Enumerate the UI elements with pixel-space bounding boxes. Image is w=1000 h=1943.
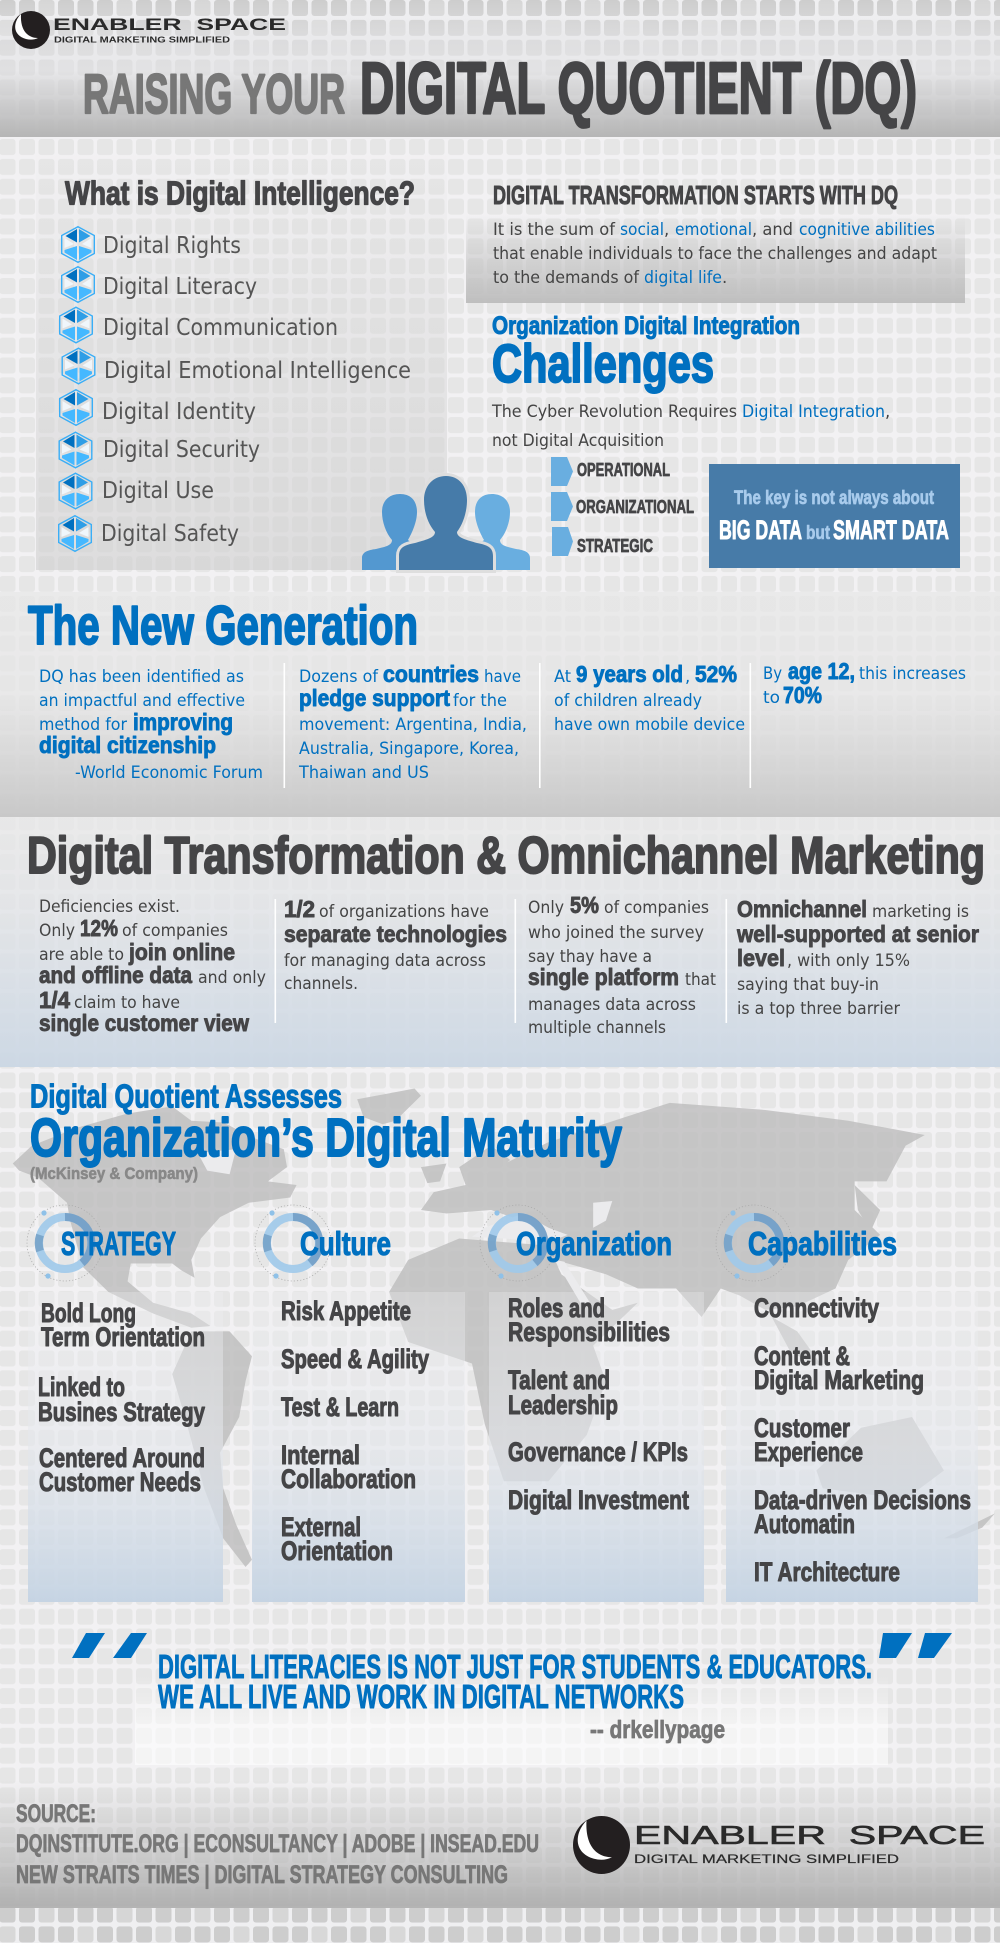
panel: digital transformation starts with DQ: , xyxy=(664,220,669,239)
list item: digital communication: Digital Communication xyxy=(103,313,338,341)
logo: top xyxy=(12,11,286,49)
list item: digital literacy: Digital Literacy xyxy=(103,272,257,300)
text: world economic forum: digital citizenship xyxy=(39,732,216,758)
panel: what is digital intelligence xyxy=(36,150,447,570)
text: deficiencies exist: of companies xyxy=(122,921,228,940)
list item: digital literacy xyxy=(62,267,257,302)
items: strategy: Customer Needs xyxy=(39,1467,201,1497)
logo: bottom xyxy=(573,1816,985,1874)
arrow: strategic: STRATEGIC xyxy=(577,536,653,556)
text: quote attribution: -- drkellypage xyxy=(590,1716,725,1744)
items: culture: External xyxy=(281,1512,361,1542)
panel: digital transformation starts with DQ: to the demands of xyxy=(493,268,640,287)
text: single platform: Only xyxy=(528,898,564,917)
items: culture: Collaboration xyxy=(281,1464,416,1494)
text: age 12: 70% xyxy=(783,682,822,708)
items: strategy: Centered Around xyxy=(39,1443,205,1473)
items: capabilities: Experience xyxy=(754,1437,863,1467)
items: strategy: Term Orientation xyxy=(41,1322,205,1352)
list item: digital rights: Digital Rights xyxy=(103,231,241,259)
text: countries pledge support: Dozens of xyxy=(299,667,379,686)
text: age 12: By xyxy=(763,664,782,683)
heading: capabilities: Capabilities xyxy=(748,1225,897,1262)
arrow: organizational xyxy=(551,492,694,521)
text: source: SOURCE: xyxy=(16,1800,96,1828)
text: source xyxy=(16,1800,539,1889)
text: deficiencies exist: Deficiencies exist. xyxy=(39,897,180,916)
arrow: operational xyxy=(551,457,670,486)
items: capabilities xyxy=(754,1293,971,1587)
panel: digital transformation starts with DQ: that enable individuals to face the challenges and adapt xyxy=(493,244,937,263)
items: strategy xyxy=(38,1298,205,1497)
items: culture: Test & Learn xyxy=(281,1392,399,1422)
items: strategy: Linked to xyxy=(38,1372,125,1402)
heading: what is digital intelligence: What is Digital Intelligence? xyxy=(65,174,415,212)
panel: digital transformation starts with DQ: , and xyxy=(752,220,793,239)
list item: digital identity: Digital Identity xyxy=(102,397,256,425)
panel: digital transformation starts with DQ: digital life xyxy=(644,268,722,287)
text: countries pledge support: pledge support xyxy=(299,685,450,711)
items: organization: Digital Investment xyxy=(508,1485,689,1515)
text: countries pledge support xyxy=(298,661,527,782)
section: organization's digital maturity headings xyxy=(30,1078,622,1183)
text: age 12: age 12, xyxy=(788,658,855,684)
items: capabilities: Content & xyxy=(754,1341,850,1371)
callout: smart data xyxy=(709,464,960,568)
text: countries pledge support: Australia, Singapore, Korea, xyxy=(299,739,519,758)
list item: digital emotional intelligence xyxy=(62,348,411,384)
heading: organization: Organization xyxy=(516,1225,672,1262)
callout: smart data: BIG DATA xyxy=(719,515,802,545)
items: culture xyxy=(281,1296,429,1566)
heading: organization digital integration: Organization Digital Integration xyxy=(492,312,800,340)
icon: people xyxy=(362,476,530,570)
panel: digital transformation starts with DQ: . xyxy=(722,268,727,287)
text: omnichannel marketing support: marketing is xyxy=(872,902,969,921)
text: omnichannel marketing support: well-supported at senior xyxy=(736,921,979,947)
text: single platform: of companies xyxy=(604,898,709,917)
text: separate technologies: of organizations have xyxy=(319,902,489,921)
panel: challenges xyxy=(362,312,960,570)
text: world economic forum: DQ has been identified as xyxy=(39,667,244,686)
logo: bottom: DIGITAL MARKETING SIMPLIFIED xyxy=(634,1854,899,1866)
items: capabilities: Digital Marketing xyxy=(754,1365,924,1395)
text: 9 years old: 9 years old xyxy=(576,661,683,687)
logo: bottom: ENABLER SPACE xyxy=(634,1820,985,1850)
text: source: DQINSTITUTE.ORG | ECONSULTANCY | ADOBE | INSEAD.EDU xyxy=(16,1830,539,1858)
text: deficiencies exist: claim to have xyxy=(74,993,180,1012)
text: separate technologies: 1/2 xyxy=(284,896,315,922)
text: countries pledge support: countries xyxy=(383,661,479,687)
text: omnichannel marketing support: Omnichannel xyxy=(737,896,867,922)
text: 9 years old: , xyxy=(685,667,690,686)
text: cyber revolution: , xyxy=(885,402,890,421)
items: organization: Governance / KPIs xyxy=(508,1437,688,1467)
text: source: NEW STRAITS TIMES | DIGITAL STRATEGY CONSULTING xyxy=(16,1861,508,1889)
list item: digital safety xyxy=(59,516,239,551)
logo: top: ENABLER SPACE xyxy=(53,15,286,34)
text: omnichannel marketing support xyxy=(736,896,979,1018)
text: deficiencies exist: are able to xyxy=(39,945,124,964)
list item: digital rights xyxy=(62,227,241,262)
section: organization's digital maturity headings: Organization’s Digital Maturity xyxy=(30,1108,622,1168)
items: organization xyxy=(508,1293,689,1515)
text: single platform: that xyxy=(685,970,716,989)
items: capabilities: IT Architecture xyxy=(754,1557,900,1587)
panel: digital transformation starts with DQ: emotional xyxy=(675,220,752,239)
panel: quote xyxy=(72,1633,952,1765)
text: cyber revolution: The Cyber Revolution Requires xyxy=(491,402,737,421)
text: omnichannel marketing support: is a top three barrier xyxy=(737,999,900,1018)
text: age 12: this increases xyxy=(859,664,966,683)
text: deficiencies exist: and only xyxy=(198,968,266,987)
panel: digital transformation starts with DQ: cognitive abilities xyxy=(799,220,935,239)
heading: the new generation: The New Generation xyxy=(28,594,418,656)
text: single platform: manages data across xyxy=(528,995,696,1014)
text: separate technologies xyxy=(284,896,507,993)
text: cyber revolution: not Digital Acquisition xyxy=(492,431,664,450)
text: single platform: multiple channels xyxy=(528,1018,666,1037)
logo: top: DIGITAL MARKETING SIMPLIFIED xyxy=(54,36,230,44)
section: organization's digital maturity headings: Digital Quotient Assesses xyxy=(30,1078,342,1114)
column: culture xyxy=(252,1205,465,1602)
items: culture: Risk Appetite xyxy=(281,1296,411,1326)
text: world economic forum: -World Economic Forum xyxy=(75,763,263,782)
list item: digital emotional intelligence: Digital Emotional Intelligence xyxy=(104,356,411,384)
heading: strategy: STRATEGY xyxy=(61,1225,176,1262)
text: deficiencies exist: 12% xyxy=(80,915,118,941)
list item: digital security xyxy=(59,432,260,468)
list item: digital safety: Digital Safety xyxy=(101,519,239,547)
text: age 12 xyxy=(763,658,966,708)
text: deficiencies exist: and offline data xyxy=(39,962,192,988)
heading: culture: Culture xyxy=(300,1225,391,1262)
text: age 12: to xyxy=(763,688,780,707)
items: culture: Orientation xyxy=(281,1536,393,1566)
text: separate technologies: for managing data across xyxy=(284,951,486,970)
text: cyber revolution xyxy=(491,402,890,450)
items: capabilities: Customer xyxy=(754,1413,850,1443)
icon: opening quote marks xyxy=(72,1633,147,1658)
text: 9 years old: have own mobile device xyxy=(554,715,745,734)
list item: digital security: Digital Security xyxy=(103,435,260,463)
items: organization: Talent and xyxy=(508,1365,610,1395)
callout: smart data: but xyxy=(806,523,831,544)
list item: digital use xyxy=(59,473,214,509)
text: world economic forum: method for xyxy=(39,715,127,734)
items: culture: Internal xyxy=(281,1440,360,1470)
column: capabilities xyxy=(716,1205,978,1602)
items: culture: Speed & Agility xyxy=(281,1344,429,1374)
text: single platform: say thay have a xyxy=(528,947,652,966)
text: omnichannel marketing support: saying that buy-in xyxy=(737,975,879,994)
text: single platform: who joined the survey xyxy=(528,923,704,942)
text: deficiencies exist: single customer view xyxy=(39,1010,249,1036)
section: the new generation xyxy=(28,594,966,788)
text: single platform: 5% xyxy=(570,892,599,918)
text: separate technologies: separate technologies xyxy=(284,921,507,947)
text: countries pledge support: Thaiwan and US xyxy=(298,763,429,782)
icon: ring xyxy=(480,1205,556,1281)
arrow: strategic xyxy=(552,527,653,556)
panel: digital transformation starts with DQ: social xyxy=(620,220,664,239)
text: quote: WE ALL LIVE AND WORK IN DIGITAL NETWORKS xyxy=(158,1678,684,1715)
text: single platform: single platform xyxy=(528,964,679,990)
text: omnichannel marketing support: , with only 15% xyxy=(787,951,910,970)
heading: challenges: Challenges xyxy=(492,334,714,394)
text: world economic forum xyxy=(39,667,263,782)
items: organization: Leadership xyxy=(508,1390,618,1420)
items: capabilities: Connectivity xyxy=(754,1293,879,1323)
items: capabilities: Automatin xyxy=(754,1509,855,1539)
items: strategy: Bold Long xyxy=(41,1298,136,1328)
column: strategy xyxy=(27,1205,223,1602)
icon: ring xyxy=(27,1205,103,1281)
text: world economic forum: improving xyxy=(133,709,233,735)
title: RAISING YOUR xyxy=(83,62,345,125)
list item: digital communication xyxy=(60,307,338,343)
world map xyxy=(13,1089,995,1567)
column: organization xyxy=(480,1205,704,1602)
text: 9 years old: At xyxy=(554,667,572,686)
section: digital transformation and omnichannel marketing xyxy=(27,827,985,1037)
arrow: operational: OPERATIONAL xyxy=(577,460,670,480)
text: cyber revolution: Digital Integration xyxy=(742,402,885,421)
text: omnichannel marketing support: level xyxy=(737,945,785,971)
items: strategy: Busines Strategy xyxy=(38,1397,205,1427)
text: quote xyxy=(158,1648,872,1715)
icon: closing quote marks xyxy=(879,1633,952,1658)
items: organization: Responsibilities xyxy=(508,1317,670,1347)
text: world economic forum: an impactful and effective xyxy=(39,691,245,710)
text: countries pledge support: for the xyxy=(453,691,507,710)
text: countries pledge support: have xyxy=(484,667,521,686)
text: deficiencies exist xyxy=(39,897,266,1036)
text: deficiencies exist: Only xyxy=(39,921,75,940)
text: 9 years old: of children already xyxy=(554,691,702,710)
panel: digital transformation starts with DQ xyxy=(466,180,965,303)
icon: ring xyxy=(255,1205,331,1281)
text: 9 years old: 52% xyxy=(695,661,737,687)
section: organization's digital maturity headings: (McKinsey & Company) xyxy=(30,1164,198,1183)
text: 9 years old xyxy=(554,661,745,734)
panel: digital transformation starts with DQ: It is the sum of xyxy=(493,220,616,239)
text: single platform xyxy=(528,892,716,1037)
list item: digital identity xyxy=(60,390,256,425)
items: organization: Roles and xyxy=(508,1293,605,1323)
text: deficiencies exist: 1/4 xyxy=(39,987,70,1013)
title xyxy=(83,49,917,129)
list item: digital use: Digital Use xyxy=(102,476,214,504)
callout: smart data: The key is not always about xyxy=(734,488,935,509)
icon: ring xyxy=(716,1205,792,1281)
arrow: organizational: ORGANIZATIONAL xyxy=(576,497,694,517)
text: deficiencies exist: join online xyxy=(128,939,235,965)
text: separate technologies: channels. xyxy=(284,974,358,993)
text: countries pledge support: movement: Argentina, India, xyxy=(299,715,527,734)
